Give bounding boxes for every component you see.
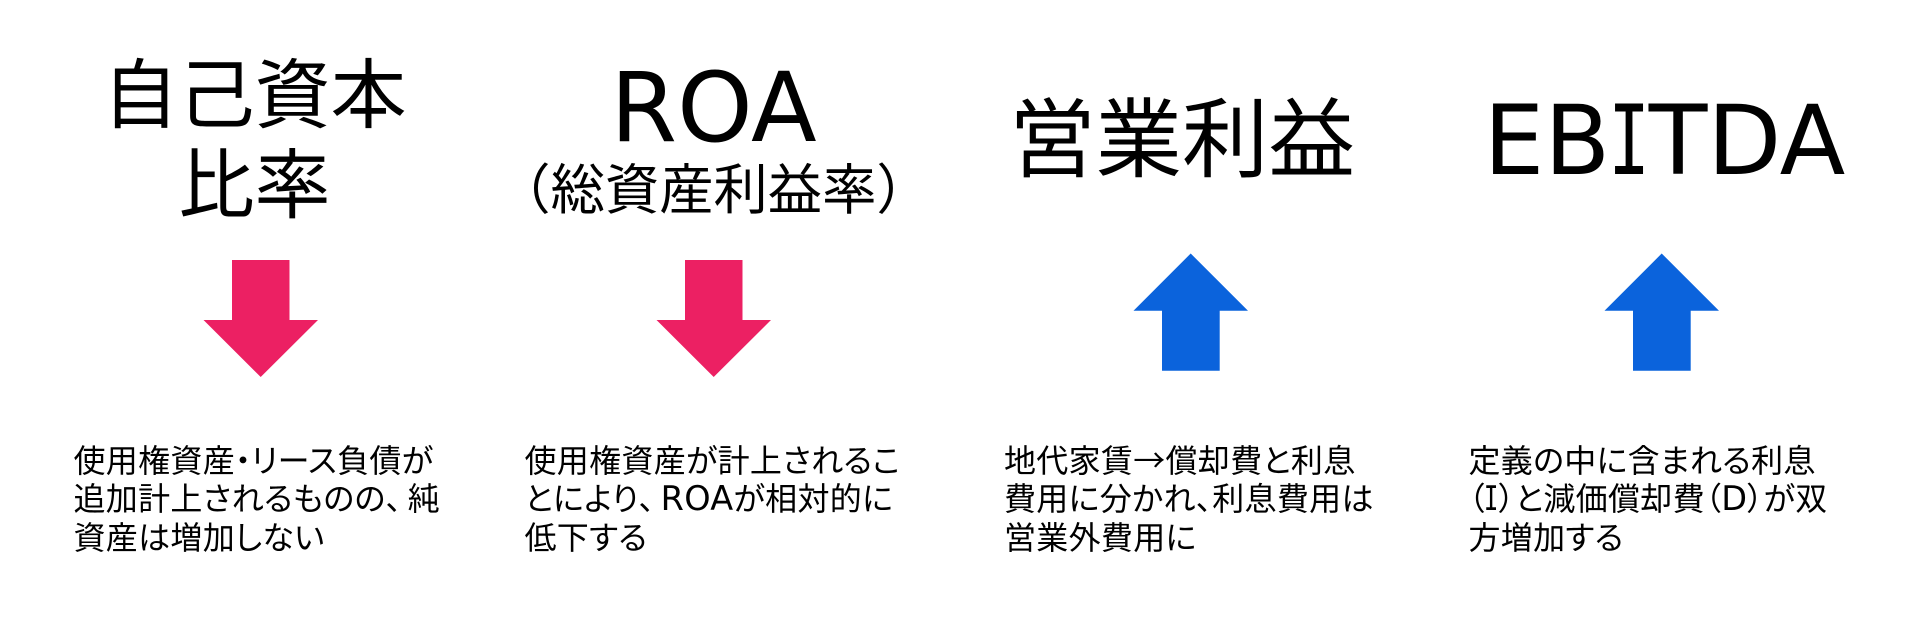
heading: 自己資本比率 — [102, 34, 406, 234]
heading: 営業利益: 営業利益 — [1009, 70, 1355, 195]
text: 説明: 使用権資産が計上されるこ — [524, 436, 900, 482]
panel: EBITDA — [1468, 85, 1845, 559]
heading: 総資産利益率: （総資産利益率） — [496, 146, 931, 225]
text: 説明: 地代家賃→償却費と利息 — [1004, 436, 1356, 482]
text: 説明: 使用権資産・リース負債が — [74, 436, 433, 482]
text: 説明: とにより、ROAが相対的に — [524, 474, 893, 520]
heading: 自己資本比率: 比率 — [178, 124, 330, 234]
text: 説明: （ ）と減価償却費（D）が双 — [1468, 474, 1828, 520]
text: 説明 — [1468, 436, 1828, 559]
text: 説明 — [1004, 436, 1374, 559]
panel: ROA — [496, 52, 931, 559]
text: 説明: 低下する — [524, 513, 647, 559]
arrow: down — [204, 260, 318, 377]
arrow: up — [1134, 254, 1248, 371]
panel: 自己資本比率 — [74, 34, 440, 559]
heading: ROA: ROA — [610, 52, 817, 164]
arrow: up — [1604, 254, 1719, 371]
text: 説明: 費用に分かれ、利息費用は — [1004, 474, 1374, 520]
panel: 営業利益 — [1004, 70, 1374, 559]
text: 説明: 資産は増加しない — [74, 513, 325, 559]
text: 説明 — [524, 436, 900, 559]
heading: EBITDA: EB TDA — [1484, 85, 1845, 197]
text: 説明 — [74, 436, 440, 559]
text: 説明: 追加計上されるものの、純 — [74, 474, 440, 520]
text: 説明: 定義の中に含まれる利息 — [1468, 436, 1816, 482]
text: 説明: 営業外費用に — [1004, 513, 1197, 559]
text: 説明: 方増加する — [1468, 513, 1624, 559]
arrow: down — [656, 260, 771, 377]
text: 説明: I — [1484, 479, 1499, 518]
heading: EBITDA: I — [1609, 85, 1650, 197]
heading: 自己資本比率: 自己資本 — [102, 34, 406, 144]
